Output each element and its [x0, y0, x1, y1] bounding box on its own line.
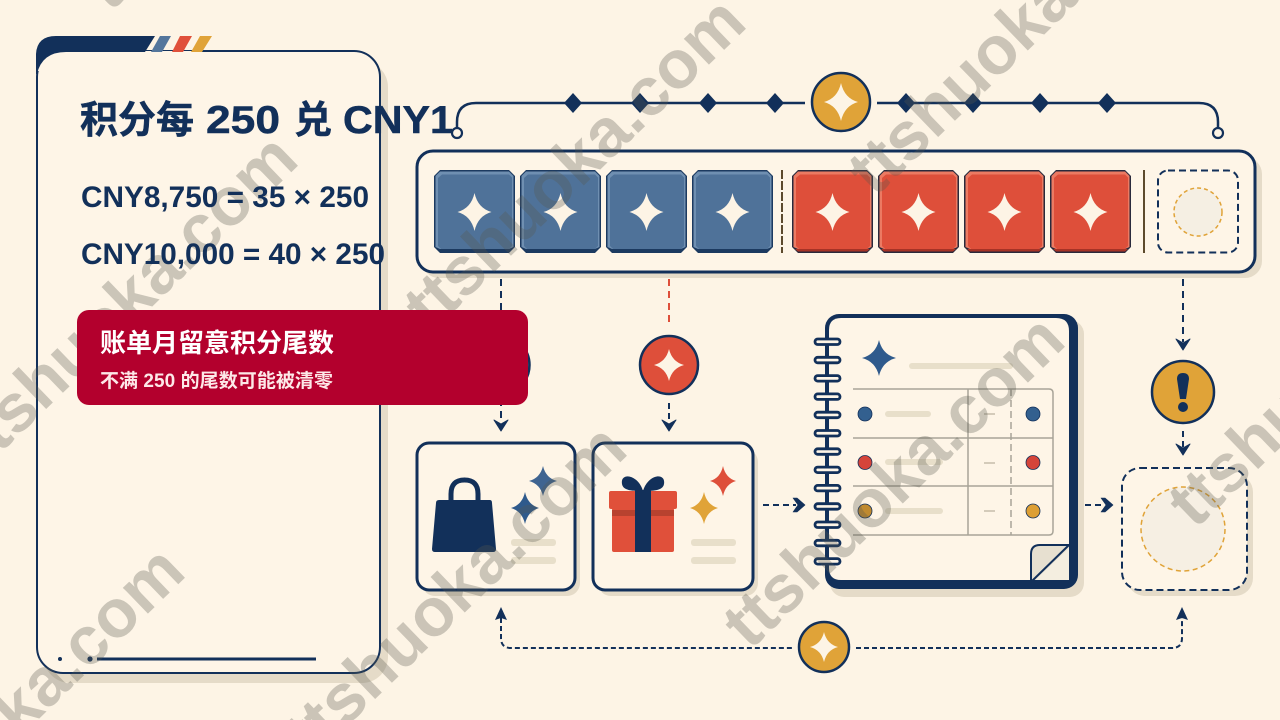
icon: red star coin [640, 336, 698, 394]
text placeholder bars [511, 539, 556, 564]
icon: blue coin behind callout [470, 336, 530, 394]
heading placeholder [909, 363, 1013, 369]
arrow: notebook to slot [1085, 498, 1113, 512]
blue point tiles [434, 170, 773, 253]
arrow: red path with coin to gift card [640, 279, 698, 431]
icon: gold star coin [799, 622, 849, 672]
title: CNY1 [343, 99, 453, 142]
panel: left summary card [36, 36, 388, 683]
title: 积分每 [80, 100, 194, 142]
panel footer line [58, 656, 316, 662]
callout heading: 账单月留意积分尾数 [100, 328, 334, 358]
icon: bag [432, 480, 496, 552]
icon: warning coin [1152, 361, 1214, 423]
title: 250 [206, 99, 280, 142]
chain connector with coin [452, 73, 1223, 138]
icon: sparkles [690, 466, 736, 524]
callout subtext: 不满 250 的尾数可能被清零 [100, 370, 333, 392]
arrow: blue path to bag card [494, 279, 508, 431]
title: 兑 [294, 100, 332, 142]
divider [781, 170, 783, 253]
arrow: gift to notebook [763, 498, 805, 512]
divider [1143, 170, 1145, 253]
dashed slot card [1122, 468, 1253, 596]
points bar panel [417, 151, 1262, 278]
spiral binding [815, 339, 840, 564]
red point tiles [792, 170, 1131, 253]
icon: gold star coin [812, 73, 870, 131]
formula: 10000: CNY10,000 = 40 × 250 [81, 238, 385, 271]
panel header tab [36, 36, 155, 74]
page curl [1031, 545, 1069, 581]
card: shopping bag [417, 443, 580, 596]
empty slot [1158, 170, 1238, 252]
table [853, 389, 1053, 535]
icon: gift [609, 476, 677, 552]
card: gift box [593, 443, 758, 596]
status dots [858, 407, 1040, 518]
notebook [815, 314, 1084, 597]
callout [77, 310, 528, 405]
arrow: path to warning coin and empty slot [1152, 279, 1214, 455]
header stripes [151, 36, 212, 52]
icon: sparkles [511, 466, 557, 524]
sparkle [862, 340, 896, 376]
formula: 8750: CNY8,750 = 35 × 250 [81, 181, 369, 214]
text placeholder bars [691, 539, 736, 564]
bottom loop connector [495, 607, 1188, 672]
